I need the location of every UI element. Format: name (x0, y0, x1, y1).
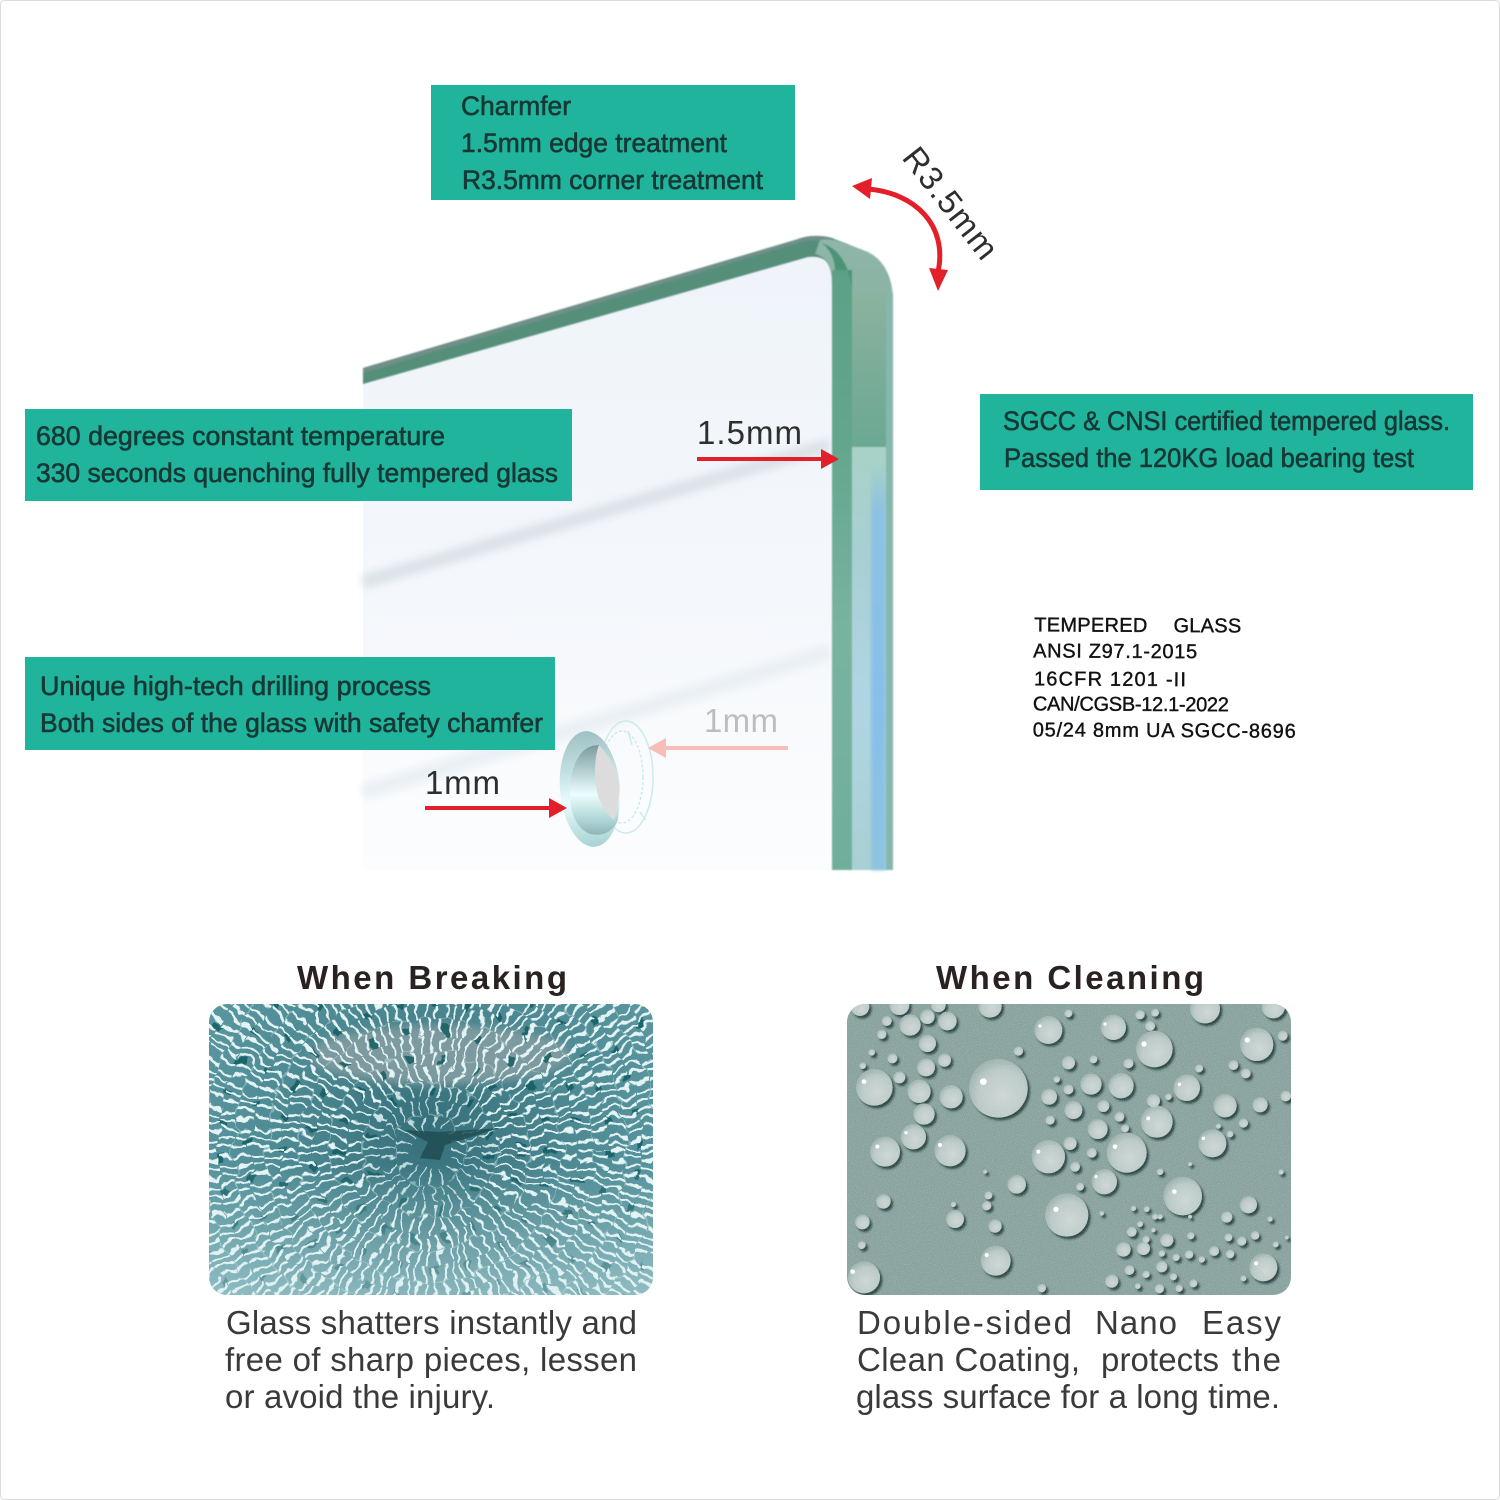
callout: certification (980, 394, 1473, 490)
label: 1mm back: 1mm (704, 702, 778, 739)
arrow: corner radius (852, 178, 948, 291)
callout: certification: Passed the 120KG load bearing test (1004, 443, 1414, 473)
arrow: 1.5mm edge (697, 449, 839, 469)
tempered glass stamp: 16CFR 1201 -II (1034, 668, 1186, 691)
text: cleaning description: Easy (1202, 1304, 1282, 1341)
callout: drilling: Unique high-tech drilling process (40, 671, 431, 701)
callout: charmfer: 1.5mm edge treatment (461, 128, 727, 158)
callout: charmfer (431, 85, 795, 200)
droplet highlights (850, 1022, 1258, 1274)
text: cleaning description: Clean Coating, (857, 1341, 1080, 1378)
arrow: 1mm front (425, 798, 567, 818)
text: breaking description: or avoid the injury. (225, 1378, 495, 1415)
text: breaking description: free of sharp pieces, lessen (225, 1341, 637, 1378)
callout: drilling (25, 657, 555, 750)
text: cleaning description: glass surface for a long time. (856, 1378, 1280, 1415)
photo: water droplets (847, 993, 1291, 1295)
callout: certification: SGCC & CNSI certified tempered glass. (1003, 406, 1450, 436)
top edge of glass (363, 236, 850, 384)
callout: drilling: Both sides of the glass with safety chamfer (40, 708, 543, 738)
text: cleaning description: Nano (1095, 1304, 1177, 1341)
label: 1mm front: 1mm (425, 764, 500, 801)
callout: charmfer: Charmfer (461, 91, 571, 121)
label: 1.5mm edge: 1.5mm (697, 414, 802, 451)
reflection streaks (363, 445, 830, 792)
photo: shattered glass (209, 1004, 653, 1295)
inner chamfer cone (570, 745, 619, 835)
lighter fragments toward the bottom (209, 1178, 653, 1295)
glass pane surface (363, 236, 893, 870)
arrow: 1mm back (648, 738, 788, 758)
impact point (405, 1128, 500, 1160)
heading: when cleaning: When Cleaning (936, 959, 1204, 996)
R3.5mm label: R3.5mm (895, 140, 1006, 266)
blurred dark backdrop (310, 1025, 570, 1085)
text: cleaning description: protects (1101, 1341, 1219, 1378)
back chamfer outline (599, 721, 653, 833)
front chamfer flange (555, 729, 625, 849)
text: breaking description: Glass shatters instantly and (226, 1304, 637, 1341)
tempered glass stamp: 05/24 8mm UA SGCC-8696 (1033, 719, 1296, 743)
speckled surface (847, 1004, 1291, 1295)
text: breaking description (225, 1304, 637, 1415)
text: cleaning description (856, 1304, 1282, 1415)
tempered glass stamp: CAN/CGSB-12.1-2022 (1033, 693, 1229, 716)
callout: temperature (25, 409, 572, 501)
tempered glass stamp: ANSI Z97.1-2015 (1033, 640, 1197, 663)
crack pattern (209, 1004, 653, 1295)
glass panel illustration (363, 236, 893, 870)
text: cleaning description: Double-sided (857, 1304, 1072, 1341)
callout: charmfer: R3.5mm corner treatment (462, 165, 763, 195)
tempered glass stamp: TEMPERED GLASS (1034, 614, 1241, 637)
text: cleaning description: the (1232, 1341, 1281, 1378)
callout: temperature: 330 seconds quenching fully tempered glass (36, 458, 558, 488)
tempered glass stamp (1033, 614, 1296, 743)
right edge of glass (815, 239, 893, 870)
droplets (848, 993, 1291, 1293)
heading: when breaking: When Breaking (297, 959, 567, 996)
callout: temperature: 680 degrees constant temperature (36, 421, 445, 451)
drilled hole icon (555, 721, 653, 849)
hole opening (595, 745, 619, 820)
